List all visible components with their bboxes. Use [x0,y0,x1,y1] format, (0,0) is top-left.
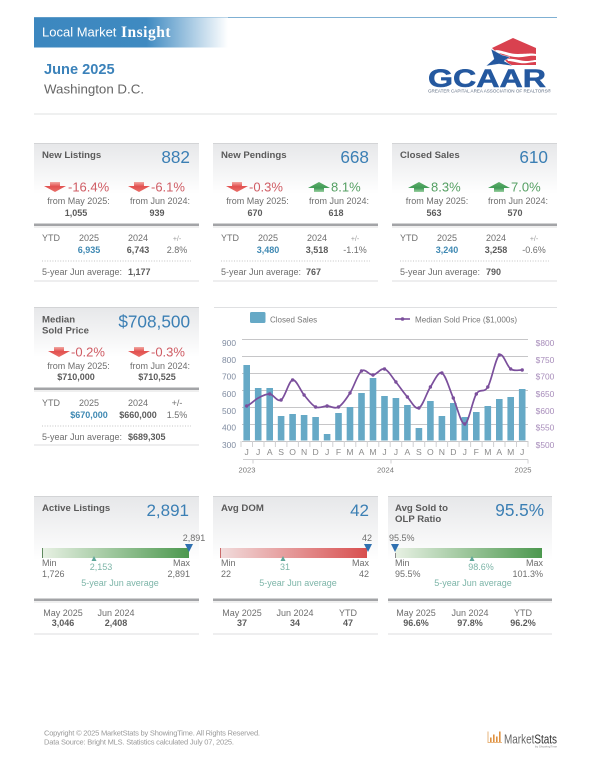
comparison values [396,608,536,628]
range gauge: Max [526,558,543,568]
panel: Avg DOM [213,496,378,634]
panel title: Avg Sold to [395,503,448,514]
YTD table: $670,000 [70,410,108,420]
5-year average: 5-year Jun average: [221,267,301,277]
right axis: median price [536,338,555,450]
right axis: median price: $800 [536,338,555,348]
left axis: closed sales: 400 [222,422,236,432]
YTD table: -1.1% [343,245,367,255]
YTD table: 2025 [437,233,457,243]
range gauge: 31 [280,562,290,572]
x axis: months and years: F [336,447,341,457]
footer copyright: Data Source: Bright MLS. Statistics calculated July 07, 2025. [44,738,234,746]
change from May 2025 [47,345,110,382]
x axis: months and years: J [520,447,524,457]
YTD table [42,398,187,420]
YTD table: 2024 [486,233,506,243]
change from Jun 2024: from Jun 2024: [130,196,190,206]
header banner [34,17,557,48]
comparison values: 96.6% [403,618,429,628]
range gauge: 5-year Jun average [259,578,337,588]
x axis: months and years: D [450,447,456,457]
panel title: Median [42,314,75,326]
x axis: months and years: 2023 [239,466,255,474]
x axis: months and years [239,441,531,474]
YTD table: 2024 [307,233,327,243]
change from Jun 2024: from Jun 2024: [309,196,369,206]
range gauge: 1,726 [42,569,65,579]
x axis: months and years: M [346,447,354,457]
x axis: months and years: J [463,447,467,457]
panel: New Pendings [213,143,378,282]
range gauge: 42 [362,533,372,543]
YTD table: $660,000 [119,410,157,420]
x axis: months and years: A [267,447,273,457]
comparison values: May 2025 [222,608,262,618]
change from May 2025: 1,055 [65,208,87,218]
YTD table: 2025 [79,233,99,243]
x axis: months and years: 2025 [515,466,531,474]
change from May 2025: -0.3% [249,180,283,195]
comparison values: 37 [237,618,247,628]
change from May 2025 [406,180,468,218]
change from Jun 2024: 570 [507,208,523,218]
change from Jun 2024 [128,180,190,218]
YTD table: +/- [172,398,182,408]
YTD table: -0.6% [522,245,546,255]
change from May 2025: 670 [247,208,263,218]
right axis: median price: $650 [536,389,555,399]
x axis: months and years: O [289,447,296,457]
headline value: 2,891 [146,501,189,520]
range gauge: Min [395,558,410,568]
x axis: months and years: F [474,447,479,457]
header banner: Local Market [42,25,117,40]
change from May 2025: from May 2025: [47,196,110,206]
x axis: months and years: J [245,447,249,457]
YTD table: 2025 [258,233,278,243]
change from Jun 2024: 618 [328,208,344,218]
footer copyright [44,728,260,746]
change from Jun 2024: $710,525 [138,372,176,382]
YTD table: 3,240 [436,245,458,255]
range gauge: 2,891 [183,533,205,543]
x axis: months and years: N [301,447,307,457]
range gauge [42,533,205,588]
YTD table: 3,518 [306,245,328,255]
headline value: $708,500 [118,312,190,332]
x axis: months and years: N [439,447,445,457]
x axis: months and years: A [359,447,365,457]
x axis: months and years: M [484,447,491,457]
range gauge: 98.6% [468,562,494,572]
YTD table: 2025 [79,398,99,408]
5-year average: 5-year Jun average: [42,267,122,277]
YTD table: YTD [42,233,61,243]
x axis: months and years: S [416,447,422,457]
range gauge: 5-year Jun average [434,578,512,588]
range gauge: 95.5% [389,533,415,543]
5-year average: 1,177 [128,267,151,277]
change from May 2025: from May 2025: [226,196,289,206]
left axis: closed sales: 300 [222,440,236,450]
left axis: closed sales [222,338,236,450]
logo: GCAAR: GCAAR [428,65,546,93]
location: Washington D.C. [44,82,144,97]
change from May 2025: 563 [426,208,442,218]
YTD table: +/- [351,236,360,243]
chart: closed sales and median sold price [214,307,557,474]
change from May 2025 [226,180,289,218]
5-year average: $689,305 [128,432,166,442]
range gauge: 5-year Jun average [81,578,159,588]
YTD table [42,233,187,255]
footer copyright: Copyright © 2025 MarketStats by ShowingTime. All Rights Reserved. [44,728,260,738]
comparison values: Jun 2024 [276,608,314,618]
comparison values: YTD [339,608,358,618]
range gauge [220,533,372,588]
x axis: months and years: A [496,447,502,457]
panel: Median Sold Price [34,307,199,446]
change from May 2025 [44,180,110,218]
comparison values: YTD [514,608,533,618]
headline value: 882 [161,147,190,167]
YTD table: 2024 [128,233,148,243]
comparison values: Jun 2024 [97,608,135,618]
panel: Active Listings [34,496,205,634]
logo: MarketStats: MarketStats [504,732,557,746]
change from Jun 2024: 7.0% [511,180,541,195]
comparison values: 47 [343,618,353,628]
comparison values: 3,046 [52,618,74,628]
YTD table: 3,258 [485,245,507,255]
legend: median sold price: Median Sold Price ($1,000s) [415,316,517,324]
5-year average: 5-year Jun average: [400,267,480,277]
panel: New Listings [34,143,199,282]
panel: Median Sold Price: Sold Price [42,326,89,336]
range gauge: 95.5% [395,569,421,579]
left axis: closed sales: 700 [222,372,236,382]
x axis: months and years: D [312,447,319,457]
change from Jun 2024: 939 [149,208,165,218]
header banner: Insight [121,24,171,41]
range gauge: Max [173,558,190,568]
range gauge: Min [42,558,57,568]
x axis: months and years: J [382,447,387,457]
change from May 2025: from May 2025: [47,361,110,371]
panel title: Active Listings [42,503,110,514]
legend: closed sales [250,312,317,324]
YTD table: YTD [42,398,61,408]
logo: GCAAR [428,38,552,94]
change from May 2025: -16.4% [68,180,110,195]
YTD table: 6,935 [78,245,100,255]
comparison values: 97.8% [457,618,483,628]
panel title: New Pendings [221,150,287,161]
change from May 2025: $710,000 [57,372,95,382]
x axis: months and years: M [507,447,514,457]
change from Jun 2024 [308,180,369,218]
YTD table: 6,743 [127,245,149,255]
x axis: months and years: J [394,447,398,457]
YTD table [221,233,367,255]
YTD table: YTD [400,233,419,243]
comparison values: May 2025 [396,608,436,618]
YTD table: +/- [530,236,539,243]
range gauge: 2,891 [167,569,190,579]
report date: June 2025 [44,62,115,78]
change from Jun 2024: 8.1% [331,180,361,195]
change from Jun 2024: from Jun 2024: [488,196,548,206]
right axis: median price: $700 [536,372,555,382]
YTD table [400,233,546,255]
left axis: closed sales: 500 [222,406,236,416]
range gauge: Max [352,558,369,568]
left axis: closed sales: 800 [222,355,236,365]
x axis: months and years: M [369,447,377,457]
panel title: Avg DOM [221,503,264,514]
change from Jun 2024: from Jun 2024: [130,361,190,371]
legend: closed sales: Closed Sales [270,316,317,324]
panel title: New Listings [42,150,101,161]
range gauge [389,533,543,588]
x axis: months and years: S [278,447,284,457]
headline value: 668 [340,147,369,167]
headline value: 95.5% [495,500,544,520]
panel: Avg Sold to OLP Ratio: OLP Ratio [395,514,441,525]
5-year average [42,432,166,442]
5-year average: 790 [486,267,501,277]
line: median sold price [245,353,524,426]
x axis: months and years: J [256,447,260,457]
range gauge: 42 [359,569,369,579]
panel: Closed Sales [392,143,557,282]
change from Jun 2024 [488,180,548,218]
logo: MarketStats: by ShowingTime [535,744,557,748]
comparison values: May 2025 [43,608,83,618]
YTD table: 3,480 [257,245,279,255]
comparison values [222,608,358,628]
change from Jun 2024 [128,345,190,382]
change from Jun 2024: -0.3% [151,345,185,360]
5-year average: 767 [306,267,321,277]
range gauge: 101.3% [512,569,543,579]
change from May 2025: from May 2025: [406,196,468,206]
YTD table: 2024 [128,398,148,408]
comparison values: 2,408 [105,618,127,628]
YTD table: 2.8% [167,245,187,255]
right axis: median price: $750 [536,355,555,365]
comparison values: 96.2% [510,618,536,628]
range gauge: 2,153 [90,562,112,572]
change from May 2025: 8.3% [431,180,461,195]
grid lines [242,340,528,442]
range gauge: 22 [221,569,231,579]
right axis: median price: $500 [536,440,555,450]
headline value: 610 [519,147,548,167]
logo: GCAAR: GREATER CAPITAL AREA ASSOCIATION OF REALTORS® [428,89,552,94]
YTD table: +/- [173,236,182,243]
change from Jun 2024: -6.1% [151,180,185,195]
change from May 2025: -0.2% [71,345,105,360]
headline value: 42 [350,501,369,520]
range gauge: Min [221,558,236,568]
comparison values: 34 [290,618,300,628]
x axis: months and years: J [325,447,329,457]
comparison values [43,608,135,628]
left axis: closed sales: 600 [222,389,236,399]
comparison values: Jun 2024 [451,608,489,618]
5-year average: 5-year Jun average: [42,432,122,442]
right axis: median price: $550 [536,422,555,432]
x axis: months and years: 2024 [377,466,394,474]
x axis: months and years: O [427,447,434,457]
YTD table: 1.5% [167,410,187,420]
YTD table: YTD [221,233,240,243]
logo: MarketStats [488,732,557,748]
panel: Avg Sold to OLP Ratio [388,496,552,634]
left axis: closed sales: 900 [222,338,236,348]
bars: closed sales [243,365,526,440]
x axis: months and years: A [405,447,411,457]
right axis: median price: $600 [536,406,555,416]
panel title: Closed Sales [400,150,460,161]
